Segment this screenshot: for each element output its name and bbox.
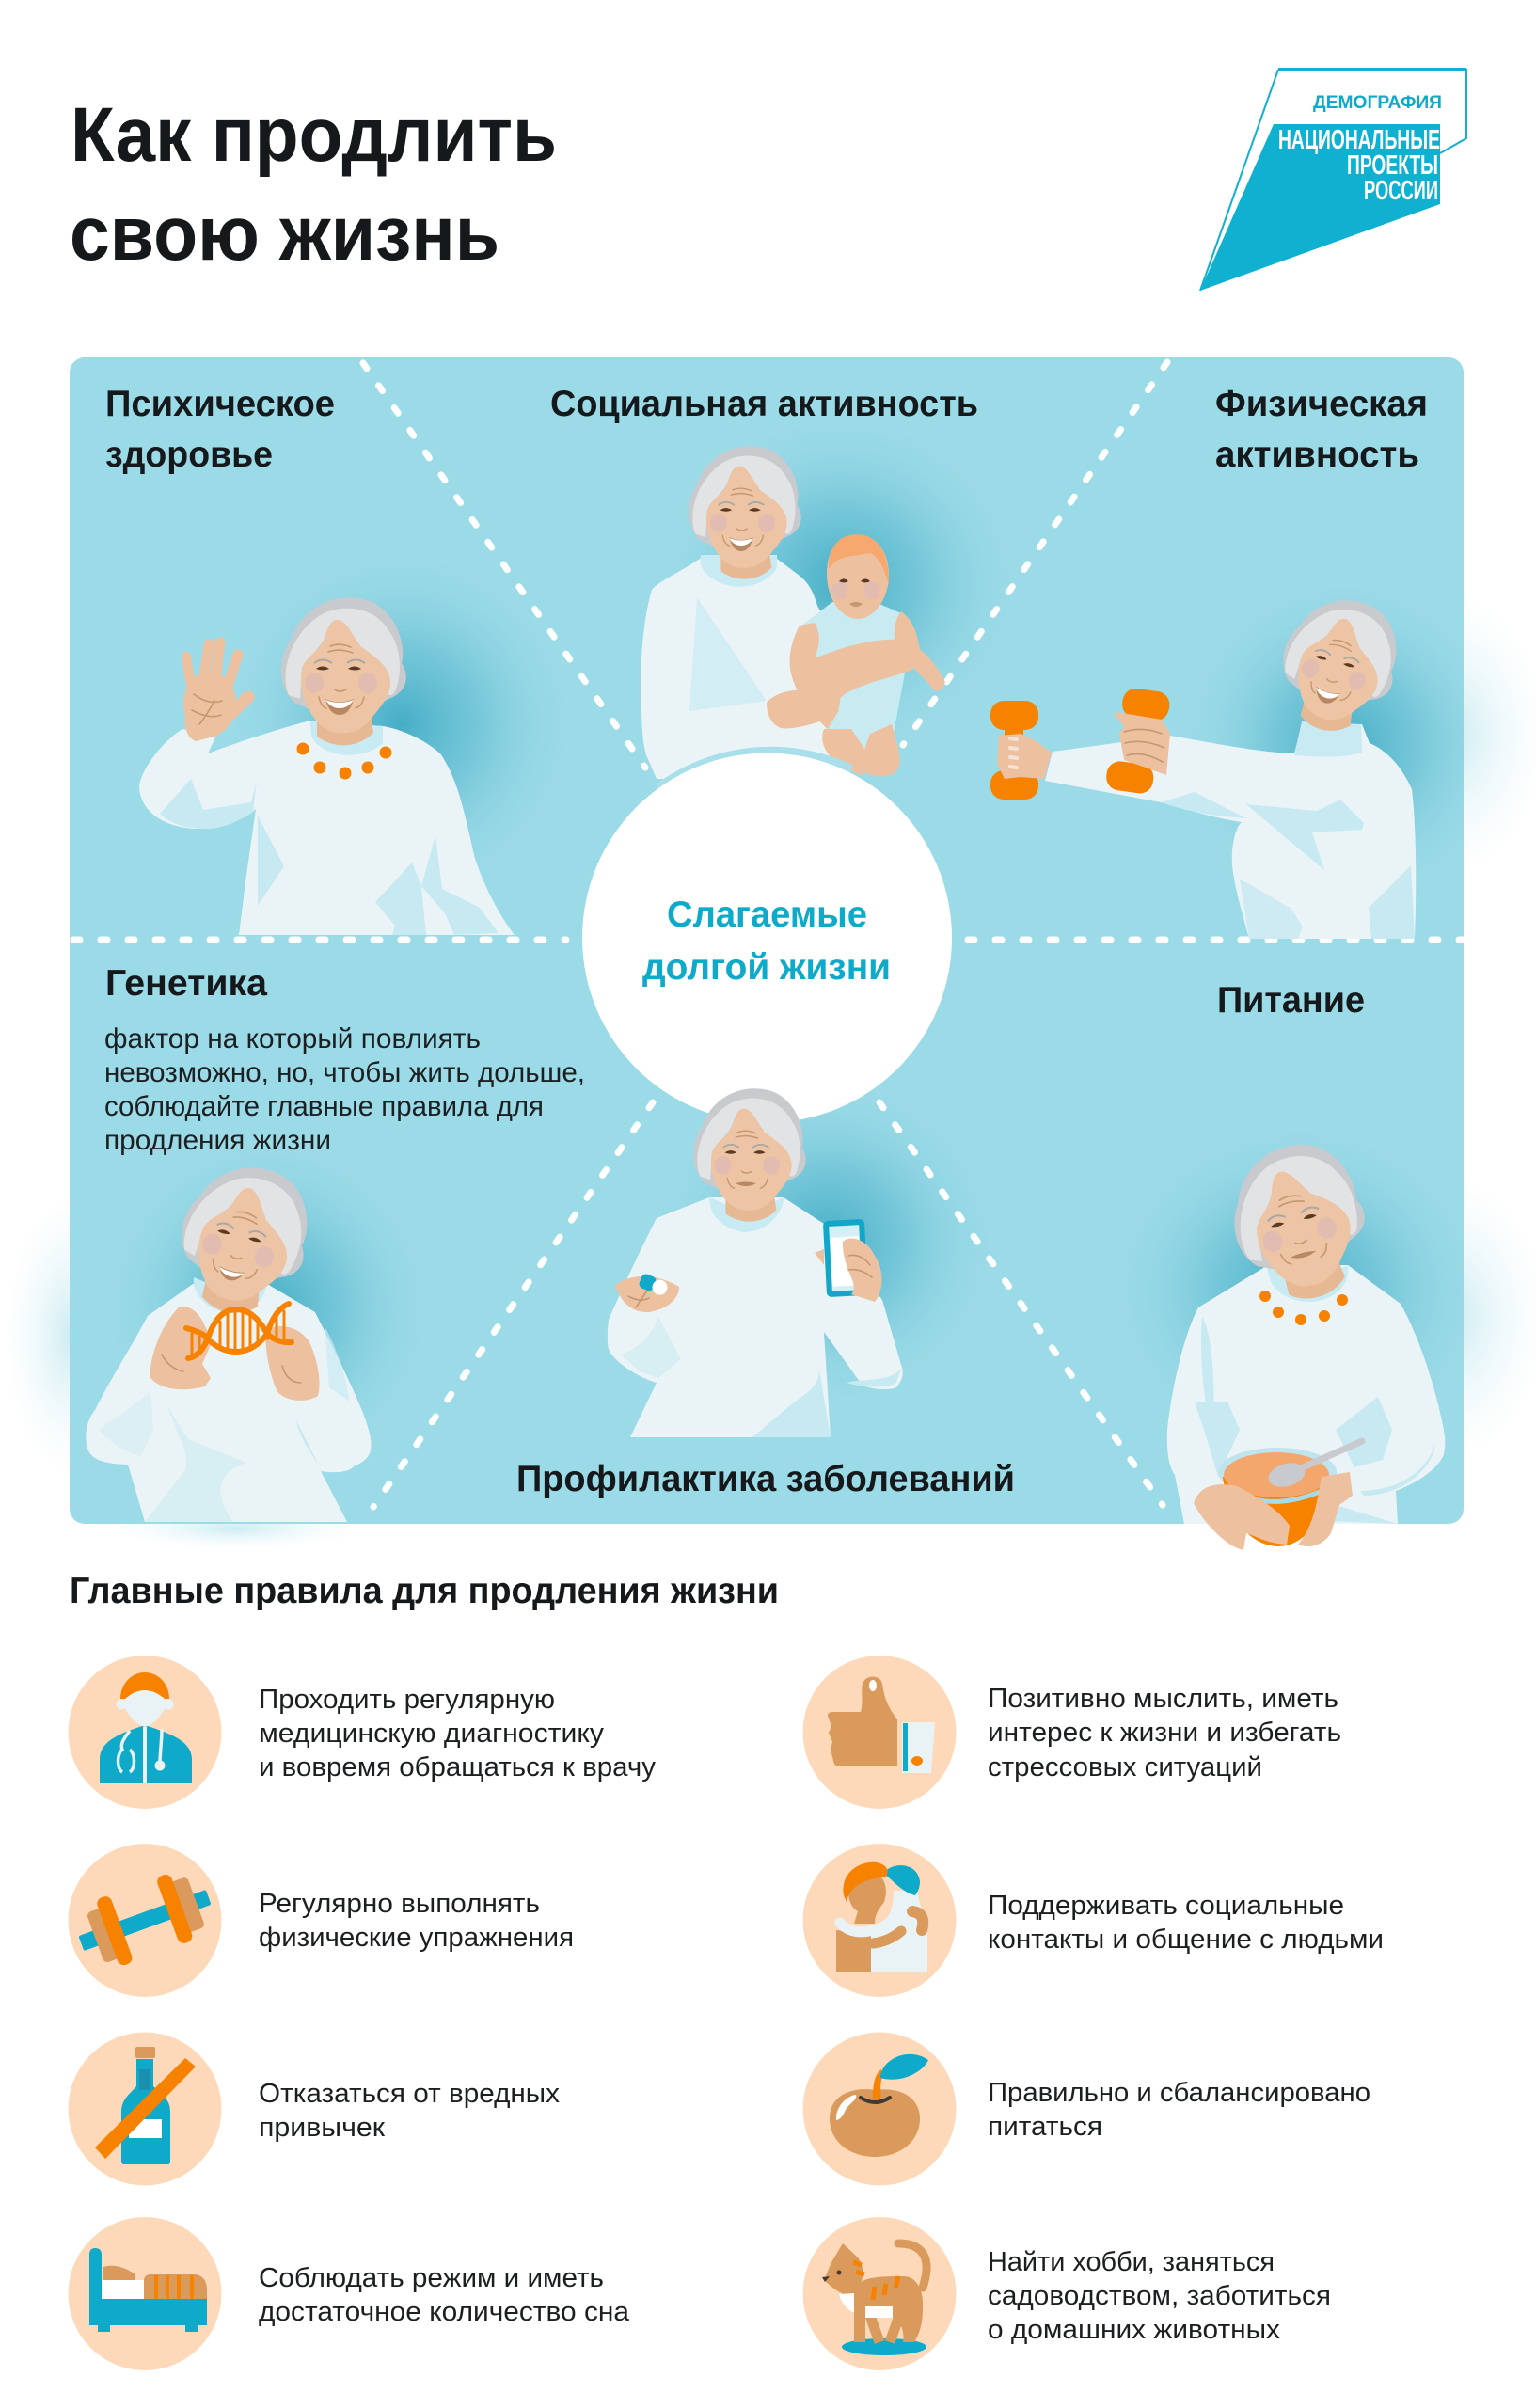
icon: apple: [803, 2032, 956, 2186]
left hand: [997, 734, 1052, 779]
icon: two people hugging: [803, 1844, 956, 1997]
glass hand: [843, 1238, 882, 1302]
rule 4: sleep: [68, 2217, 629, 2370]
genetics text: продления жизни: [104, 1125, 331, 1156]
baby: [790, 534, 945, 776]
pill: [638, 1273, 670, 1297]
rule text: Соблюдать режим и иметь: [259, 2263, 604, 2293]
panel headings: Социальная активность: [550, 384, 978, 424]
icon: bed: [68, 2217, 222, 2370]
panel headings: Питание: [1217, 980, 1365, 1021]
center circle: долгой жизни: [642, 947, 891, 988]
DNA helix: [186, 1304, 292, 1358]
logo: Демография, национальные проекты России: ДЕМОГРАФИЯ: [1313, 93, 1442, 113]
hands: [1194, 1484, 1290, 1550]
center circle: [582, 752, 952, 1123]
logo: Демография, национальные проекты России: РОССИИ: [1364, 176, 1438, 206]
rule 2: exercise: [68, 1844, 574, 1997]
rule text: Найти хобби, заняться: [988, 2247, 1275, 2277]
necklace beads: [297, 743, 391, 779]
rule text: [259, 1889, 574, 1953]
rule text: медицинскую диагностику: [259, 1719, 605, 1749]
rule 1: doctor: [68, 1656, 657, 1809]
genetics text: соблюдайте главные правила для: [104, 1091, 544, 1122]
icon: barbell: [68, 1844, 222, 1997]
rule 8: hobby: [803, 2217, 1331, 2370]
rule 5: positive thinking: [803, 1656, 1341, 1809]
rule text: привычек: [259, 2113, 386, 2143]
rules heading: Главные правила для продления жизни: [70, 1571, 779, 1611]
bowl: [1218, 1448, 1337, 1497]
panel headings: Профилактика заболеваний: [516, 1459, 1015, 1499]
rule text: [988, 2078, 1370, 2142]
rule 6: social contacts: [803, 1844, 1384, 1997]
rule text: интерес к жизни и избегать: [988, 1718, 1341, 1748]
rule text: стрессовых ситуаций: [988, 1752, 1262, 1782]
icon: thumbs up: [803, 1656, 956, 1809]
rule text: Правильно и сбалансировано: [988, 2078, 1370, 2108]
rule text: Проходить регулярную: [259, 1685, 555, 1715]
rule text: [259, 1685, 657, 1782]
rule text: Позитивно мыслить, иметь: [988, 1684, 1338, 1714]
hands: [150, 1307, 213, 1389]
title: свою жизнь: [70, 191, 499, 277]
logo: Демография, национальные проекты России: ПРОЕКТЫ: [1347, 150, 1438, 181]
rule text: достаточное количество сна: [259, 2297, 629, 2327]
rule text: Регулярно выполнять: [259, 1889, 540, 1919]
rule text: [259, 2079, 560, 2143]
dumbbell right: [1104, 686, 1171, 796]
figure: nutrition, grandmother with bowl: [1167, 1133, 1445, 1550]
rule text: о домашних животных: [988, 2315, 1280, 2345]
logo: Демография, национальные проекты России: НАЦИОНАЛЬНЫЕ: [1278, 125, 1440, 155]
title: Как продлить: [71, 92, 557, 178]
panel headings: Психическое: [105, 384, 335, 424]
title: [70, 92, 557, 277]
rule text: [259, 2263, 629, 2327]
rule text: [988, 1684, 1341, 1782]
figure: physical activity, grandmother with dumbbells: [990, 587, 1416, 939]
glass: [826, 1222, 865, 1294]
dumbbell left: [990, 701, 1038, 800]
right hand: [1113, 712, 1170, 775]
soft glows outside panel: [5, 593, 1536, 1549]
rule text: Отказаться от вредных: [259, 2079, 560, 2109]
figure: mental health, waving grandmother: [139, 597, 515, 935]
dashed dividers: [73, 362, 1464, 1507]
figure: social activity, grandmother holding baby: [641, 446, 945, 779]
icon: doctor: [68, 1656, 222, 1809]
rule 7: balanced nutrition: [803, 2032, 1370, 2186]
rule text: питаться: [988, 2112, 1102, 2142]
genetics text: невозможно, но, чтобы жить дольше,: [104, 1057, 585, 1088]
icon: crossed-out bottle: [68, 2032, 222, 2186]
figure: disease prevention, grandmother with pill and glass: [608, 1088, 903, 1437]
panel headings: активность: [1215, 435, 1419, 475]
rule text: [988, 1891, 1384, 1955]
panel headings: здоровье: [105, 435, 273, 475]
grandmother arm and hands: [808, 640, 914, 701]
rule text: физические упражнения: [259, 1923, 574, 1953]
rule 3: bad habits: [68, 2032, 560, 2186]
pill hand: [615, 1276, 679, 1312]
genetics text: фактор на который повлиять: [104, 1023, 481, 1054]
logo: Демография, национальные проекты России: [1200, 68, 1466, 291]
waving hand: [183, 642, 248, 741]
center circle: Слагаемые: [667, 895, 867, 935]
panel headings: [105, 384, 1428, 1499]
panel glows: [145, 456, 1464, 1396]
rule text: Поддерживать социальные: [988, 1891, 1344, 1921]
panel headings: Генетика: [105, 963, 267, 1004]
rule text: [988, 2247, 1331, 2345]
rule text: контакты и общение с людьми: [988, 1925, 1384, 1955]
rule text: и вовремя обращаться к врачу: [259, 1752, 657, 1782]
figure: genetics, grandmother with DNA: [86, 1153, 371, 1522]
spoon: [1292, 1441, 1362, 1472]
icon: cat: [803, 2217, 956, 2370]
rule text: садоводством, заботиться: [988, 2281, 1331, 2311]
panel headings: Физическая: [1215, 384, 1428, 424]
panel: factors of long life: [70, 357, 1464, 1524]
genetics text: [104, 1023, 585, 1156]
